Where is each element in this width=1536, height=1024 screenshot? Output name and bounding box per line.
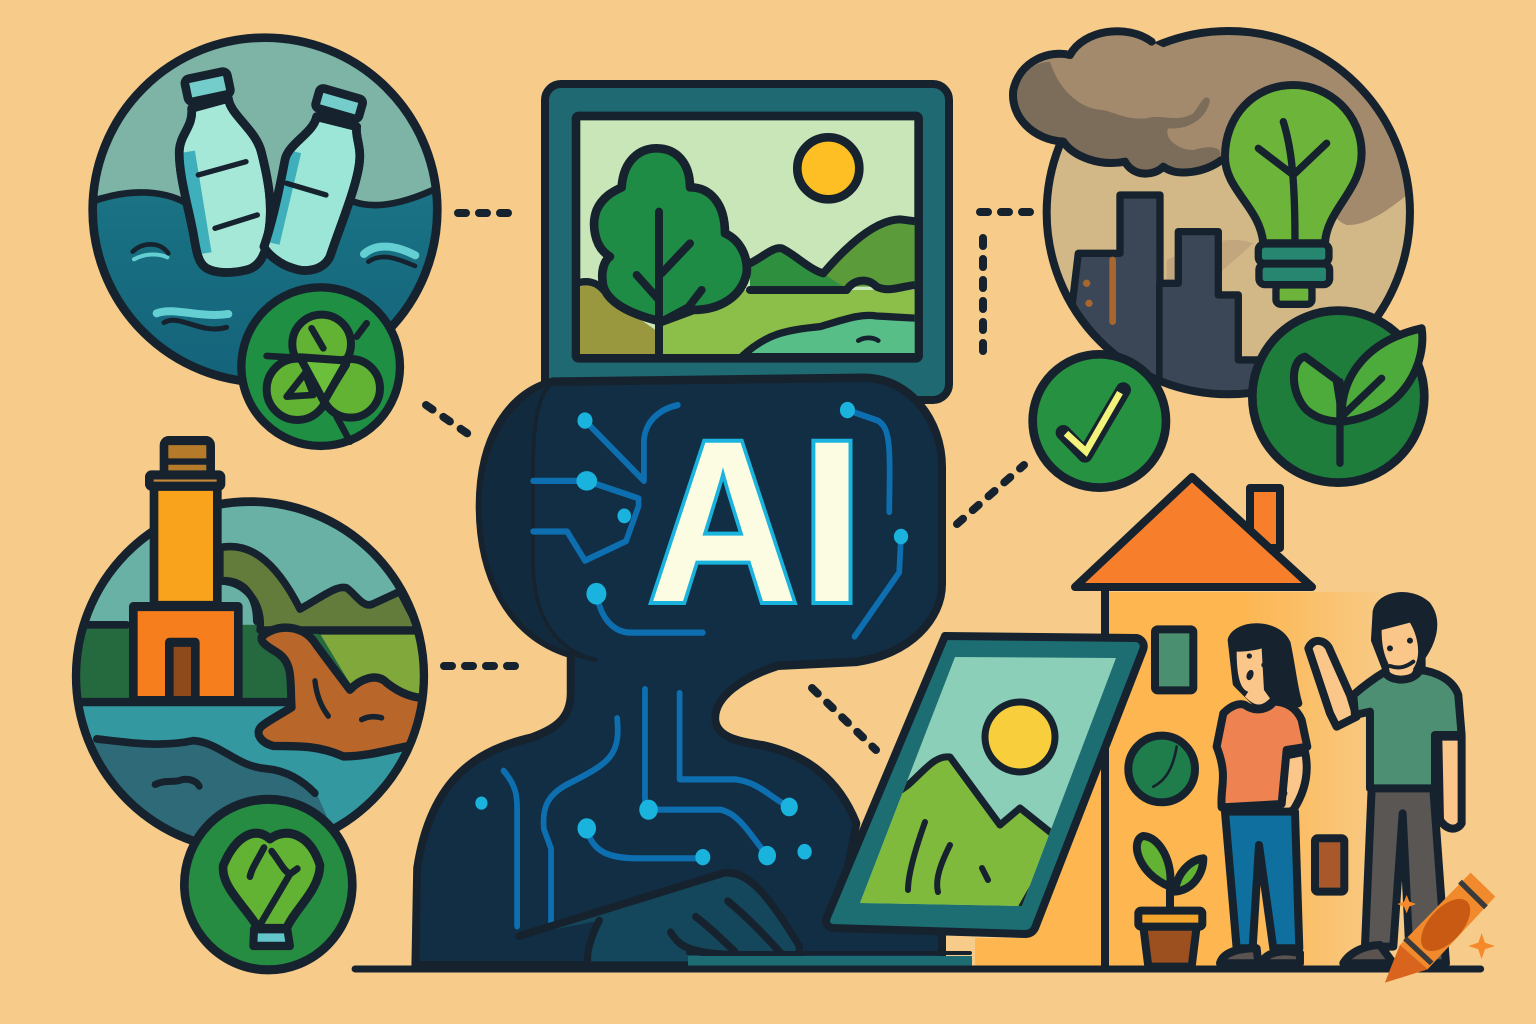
keyboard — [688, 953, 972, 966]
panel: smog, city and green bulb — [1013, 27, 1427, 488]
circuit nodes — [475, 402, 908, 865]
arm and hand — [519, 873, 799, 965]
panel: plastic bottles in water — [80, 27, 453, 446]
house — [975, 477, 1400, 968]
panel: factory and polluted river — [70, 441, 437, 970]
sludge spill — [258, 628, 430, 756]
water ripples — [133, 244, 415, 329]
circuit traces — [504, 405, 901, 926]
icon: green light bulb — [1225, 85, 1362, 304]
man — [1308, 596, 1462, 963]
icon: recycling badge — [241, 287, 400, 446]
head shade — [480, 382, 596, 660]
window: brown — [1315, 838, 1344, 892]
AI figure — [415, 378, 942, 965]
tablet picture — [860, 753, 1052, 906]
window: round — [1128, 736, 1195, 802]
AI lettering: A — [648, 393, 798, 650]
AI lettering: I — [800, 393, 864, 650]
plant in pot — [1137, 836, 1203, 967]
ground line — [355, 958, 1481, 979]
window: rectangle — [1155, 629, 1193, 690]
connector dots — [426, 212, 1040, 750]
sparkles — [1397, 895, 1495, 959]
woman — [1217, 627, 1307, 963]
icon: leaf badge — [1252, 311, 1424, 483]
smoke cloud — [1013, 31, 1243, 174]
house details, people, crayon — [355, 596, 1495, 983]
tablet — [826, 636, 1144, 934]
monitor picture — [576, 116, 919, 358]
city buildings — [1070, 191, 1258, 390]
monitor — [545, 84, 949, 400]
bottle right — [264, 87, 364, 271]
bottle left — [179, 71, 270, 273]
factory tower — [133, 441, 238, 701]
tree — [594, 148, 747, 354]
icon: check badge — [1033, 354, 1166, 488]
crayon — [1385, 873, 1495, 983]
icon: heart-shaped bulb badge — [184, 799, 352, 970]
arc behind tower — [220, 581, 257, 621]
